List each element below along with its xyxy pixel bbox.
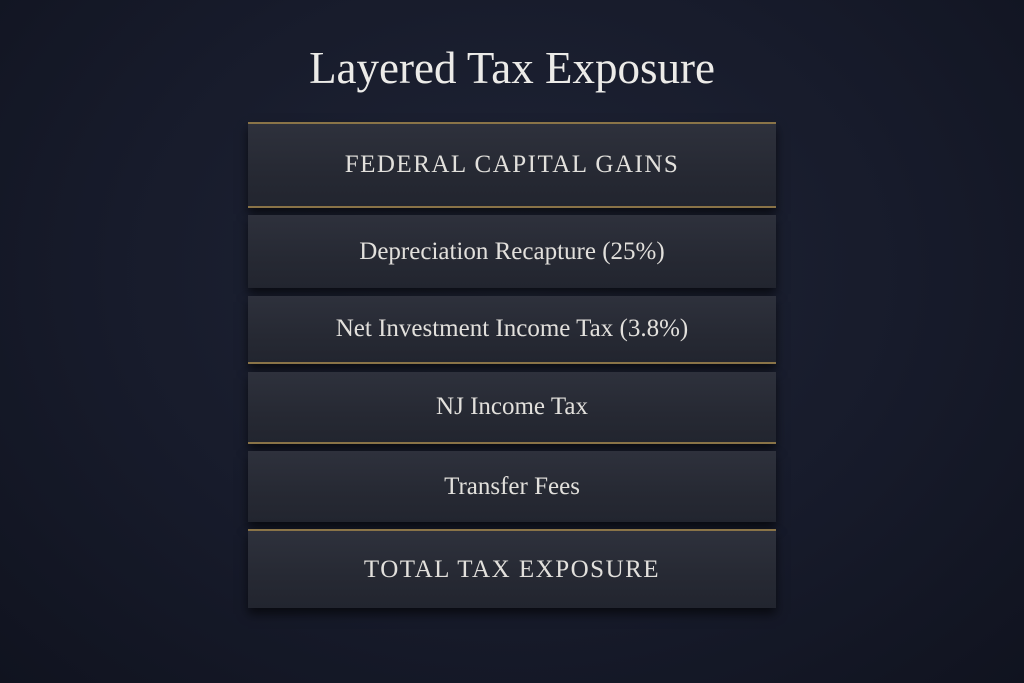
panel: total tax exposure: TOTAL TAX EXPOSURE bbox=[364, 556, 660, 582]
panel: federal capital gains: FEDERAL CAPITAL GAINS bbox=[345, 151, 679, 178]
panel: depreciation recapture: Depreciation Recapture (25%) bbox=[359, 238, 665, 264]
panel: NJ income tax: NJ Income Tax bbox=[436, 393, 588, 420]
title: Layered Tax Exposure bbox=[309, 43, 715, 93]
panel: transfer fees bbox=[248, 451, 776, 522]
panel: NIIT bbox=[248, 296, 776, 364]
panel: NIIT: Net Investment Income Tax (3.8%) bbox=[336, 315, 688, 342]
panel: depreciation recapture bbox=[248, 215, 776, 288]
panel: NJ income tax bbox=[248, 372, 776, 444]
panel: transfer fees: Transfer Fees bbox=[444, 472, 580, 500]
panel: total tax exposure bbox=[248, 529, 776, 608]
panel: federal capital gains bbox=[248, 122, 776, 208]
